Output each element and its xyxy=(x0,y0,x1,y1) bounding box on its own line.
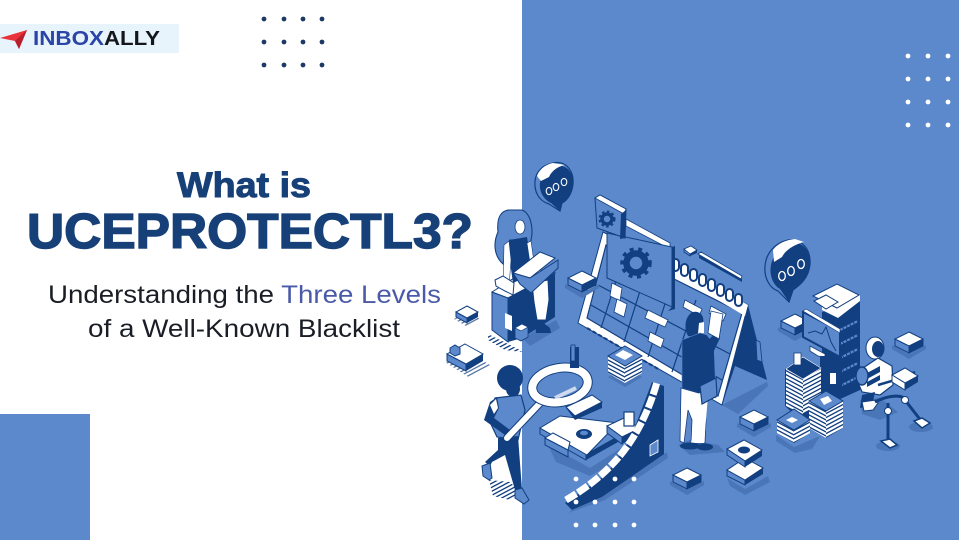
subtitle line 2: of a Well-Known Blacklist xyxy=(88,315,400,343)
woman on laptop xyxy=(488,210,560,352)
cube: near monitor xyxy=(778,314,812,341)
background panel: blue right side xyxy=(522,0,959,540)
cube: flat near board xyxy=(565,271,599,298)
icon: right speech bubble xyxy=(765,239,810,302)
stacked pages left xyxy=(570,345,642,387)
man at board xyxy=(678,311,725,455)
calendar board xyxy=(578,232,768,414)
dot grid: top right xyxy=(906,54,950,127)
platforms with gear xyxy=(540,395,648,476)
curved ramp xyxy=(565,382,668,513)
gear box xyxy=(595,195,626,239)
cube: bottom xyxy=(670,468,704,495)
logo: InboxAlly xyxy=(0,24,179,53)
title: What is: What is xyxy=(177,166,311,205)
illustration: isometric workspace xyxy=(445,163,933,513)
cube: right xyxy=(892,332,926,359)
magnifier glass and runner xyxy=(482,365,529,504)
icon: left speech bubble xyxy=(535,163,573,211)
dot grid: top centre xyxy=(262,17,324,67)
cube: tiny near bar xyxy=(684,246,697,256)
robot xyxy=(856,337,933,451)
subtitle line 1: Understanding the Three Levels xyxy=(48,281,441,309)
server rack with monitor xyxy=(803,284,860,400)
platform: striped left lower xyxy=(445,344,490,378)
logo: InboxAlly: ALLY xyxy=(104,28,161,50)
magnifier xyxy=(507,363,591,438)
logo: InboxAlly: INBOX xyxy=(33,28,105,50)
dot grid: bottom centre xyxy=(574,477,636,527)
paper stacks xyxy=(776,353,843,453)
title: UCEPROTECTL3?: UCEPROTECTL3? xyxy=(27,205,473,259)
decorative square: bottom left xyxy=(0,414,90,540)
small bar xyxy=(698,252,742,282)
cube: by man xyxy=(737,410,771,437)
cube: small striped left xyxy=(454,306,480,326)
platform: bottom centre xyxy=(727,440,770,495)
gear panel xyxy=(607,219,675,311)
